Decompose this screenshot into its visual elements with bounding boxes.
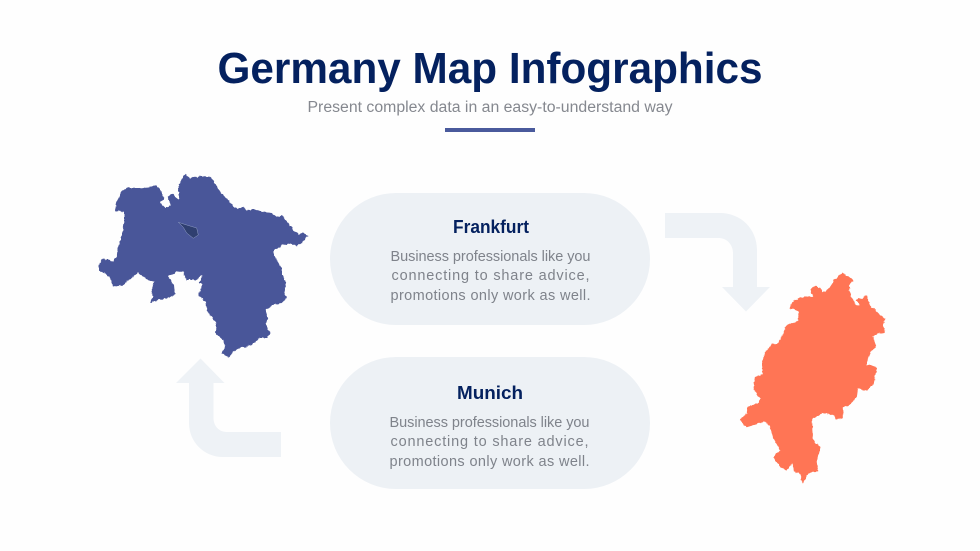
arrow: top right, pointing down xyxy=(665,213,770,312)
heading: Frankfurt: Frankfurt xyxy=(453,216,529,237)
panel: Munich xyxy=(330,357,650,489)
text block: Munich description: promotions only work as well. xyxy=(390,454,590,470)
text block: Munich description: connecting to share advice, xyxy=(390,434,588,450)
map: Hesse in orange xyxy=(739,273,886,483)
map detail: Bremen enclave xyxy=(178,222,198,238)
map: Lower Saxony in blue xyxy=(99,174,308,358)
text block: Frankfurt description: promotions only work as well. xyxy=(390,288,590,304)
text block: Frankfurt description: Business professionals like you xyxy=(390,249,590,265)
text block: Munich description: Business professionals like you xyxy=(390,415,590,431)
text block: Frankfurt description: connecting to share advice, xyxy=(392,268,590,284)
title underline xyxy=(445,128,535,132)
panel: Frankfurt xyxy=(330,193,650,325)
subtitle: Present complex data in an easy-to-understand way xyxy=(308,99,673,116)
arrow: bottom left, pointing up xyxy=(176,358,281,457)
text block: Munich description xyxy=(390,415,590,470)
title: Germany Map Infographics xyxy=(218,44,762,93)
heading: Munich: Munich xyxy=(457,382,523,403)
text block: Frankfurt description xyxy=(390,249,590,304)
